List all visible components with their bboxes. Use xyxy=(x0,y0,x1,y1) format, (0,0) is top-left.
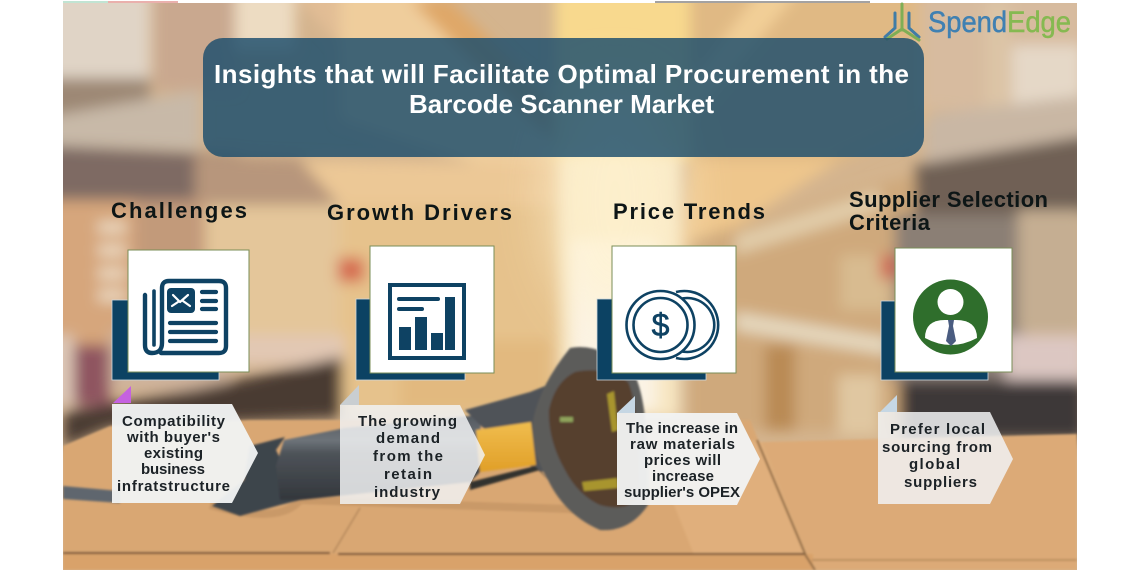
upper left shelves xyxy=(40,0,150,80)
right middle shelves xyxy=(690,0,930,230)
icon card xyxy=(612,246,736,373)
icon card backing xyxy=(356,299,465,380)
far right shelves xyxy=(920,0,1090,110)
callout: challenges text: business xyxy=(141,461,205,478)
callout: challenges text: existing xyxy=(144,445,203,462)
top edge strip xyxy=(63,1,870,3)
callout: growth drivers text xyxy=(340,405,485,504)
icon card backing xyxy=(881,301,988,380)
callout: price trends text: supplier's OPEX xyxy=(624,484,740,501)
icon: supplier person xyxy=(913,280,988,354)
callout: price trends text: increase xyxy=(652,468,714,485)
callout triangle xyxy=(880,395,897,412)
icon: newspaper xyxy=(145,281,226,353)
title xyxy=(214,59,909,119)
icon card xyxy=(128,250,249,372)
callout: supplier selection text xyxy=(878,412,1013,504)
callout: challenges text: with buyer's xyxy=(126,429,220,446)
icon card xyxy=(370,246,494,373)
logo wordmark: SpendEdge xyxy=(928,6,1071,39)
title: Insights that will Facilitate Optimal Procurement in the xyxy=(214,59,909,89)
panel: growth drivers xyxy=(327,200,512,504)
heading: price trends: Price Trends xyxy=(613,199,765,224)
heading: supplier selection criteria: Supplier Selection xyxy=(849,187,1048,212)
callout triangle xyxy=(340,385,359,405)
title: Barcode Scanner Market xyxy=(409,89,714,119)
logo: SpendEdge xyxy=(885,4,1071,40)
icon: coins xyxy=(626,291,718,359)
callout: price trends text: raw materials xyxy=(630,436,735,453)
callout: challenges text: infratstructure xyxy=(117,478,230,495)
heading: challenges: Challenges xyxy=(111,198,247,223)
callout triangle xyxy=(113,386,131,403)
panel: price trends xyxy=(597,199,765,505)
scanner nose xyxy=(212,437,300,516)
callout: growth drivers text: demand xyxy=(376,430,440,447)
callout: price trends text: The increase in xyxy=(626,420,738,437)
icon: coins: $ xyxy=(652,307,670,343)
panel: challenges xyxy=(111,198,258,503)
icon: bar chart report xyxy=(388,283,466,360)
callout: supplier selection text: sourcing from xyxy=(882,439,992,456)
callout: supplier selection text: global xyxy=(909,456,960,473)
grip xyxy=(276,415,482,500)
heading: growth drivers: Growth Drivers xyxy=(327,200,512,225)
warm aisle glow xyxy=(528,157,702,301)
centre bright aisle xyxy=(555,0,695,160)
icon: SpendEdge mark xyxy=(885,4,919,40)
mid left stock xyxy=(63,192,136,346)
callout triangle xyxy=(617,396,635,413)
callout: supplier selection text: suppliers xyxy=(904,474,977,491)
cardboard boxes xyxy=(63,420,1077,570)
heading: supplier selection criteria xyxy=(849,187,1048,235)
barcode scanner xyxy=(63,347,648,530)
heading: supplier selection criteria: Criteria xyxy=(849,210,931,235)
panel: supplier selection criteria xyxy=(849,187,1048,504)
callout: growth drivers text: from the xyxy=(373,448,443,465)
callout: growth drivers text: retain xyxy=(384,466,432,483)
callout: challenges text xyxy=(112,404,258,503)
callout: supplier selection text: Prefer local xyxy=(890,421,985,438)
icon card xyxy=(895,248,1012,372)
callout: price trends text xyxy=(617,413,760,505)
icon card backing xyxy=(112,300,219,380)
callout: growth drivers text: industry xyxy=(374,484,441,501)
callout: challenges text: Compatibility xyxy=(122,413,226,430)
scanner head xyxy=(533,347,648,530)
callout: growth drivers text: The growing xyxy=(358,413,457,430)
icon card backing xyxy=(597,299,706,380)
callout: price trends text: prices will xyxy=(644,452,721,469)
title panel xyxy=(203,38,924,157)
